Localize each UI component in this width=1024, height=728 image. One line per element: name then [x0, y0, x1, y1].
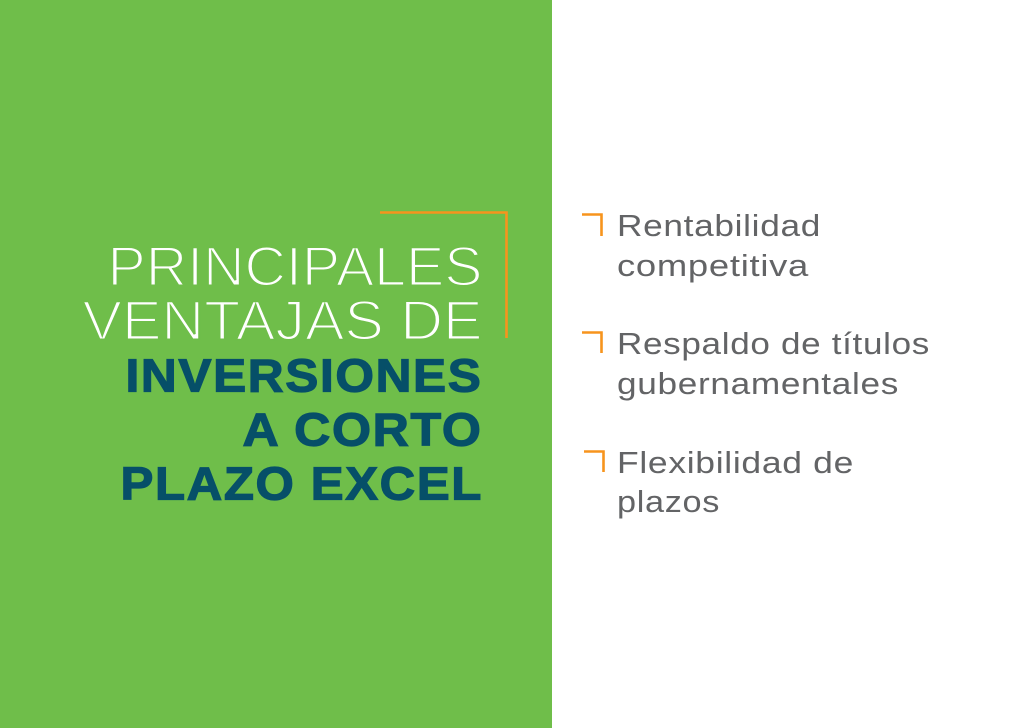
text: Respaldo de títulos: Respaldo de títulos [617, 326, 930, 361]
list item: respaldo de títulos gubernamentales [582, 326, 930, 401]
icon: orange bracket 2 [582, 332, 602, 353]
text: plazos: plazos [617, 484, 720, 519]
icon: orange bracket 1 [582, 214, 602, 236]
title [82, 234, 483, 510]
text: Flexibilidad de: Flexibilidad de [617, 445, 854, 480]
list item: flexibilidad de plazos [584, 445, 854, 519]
list item: rentabilidad competitiva [582, 208, 821, 283]
text: competitiva: competitiva [617, 248, 809, 283]
text: gubernamentales: gubernamentales [617, 366, 899, 401]
text: Rentabilidad: Rentabilidad [617, 208, 821, 243]
title line: PRINCIPALES: PRINCIPALES [108, 234, 482, 297]
icon: large orange corner bracket [380, 212, 506, 338]
panel: green background [0, 0, 552, 728]
title line: A CORTO: A CORTO [242, 404, 482, 456]
title line: PLAZO EXCEL: PLAZO EXCEL [120, 458, 483, 510]
icon: orange bracket 3 [584, 452, 604, 472]
title line: INVERSIONES: INVERSIONES [126, 350, 482, 402]
title line: VENTAJAS DE: VENTAJAS DE [82, 288, 483, 351]
